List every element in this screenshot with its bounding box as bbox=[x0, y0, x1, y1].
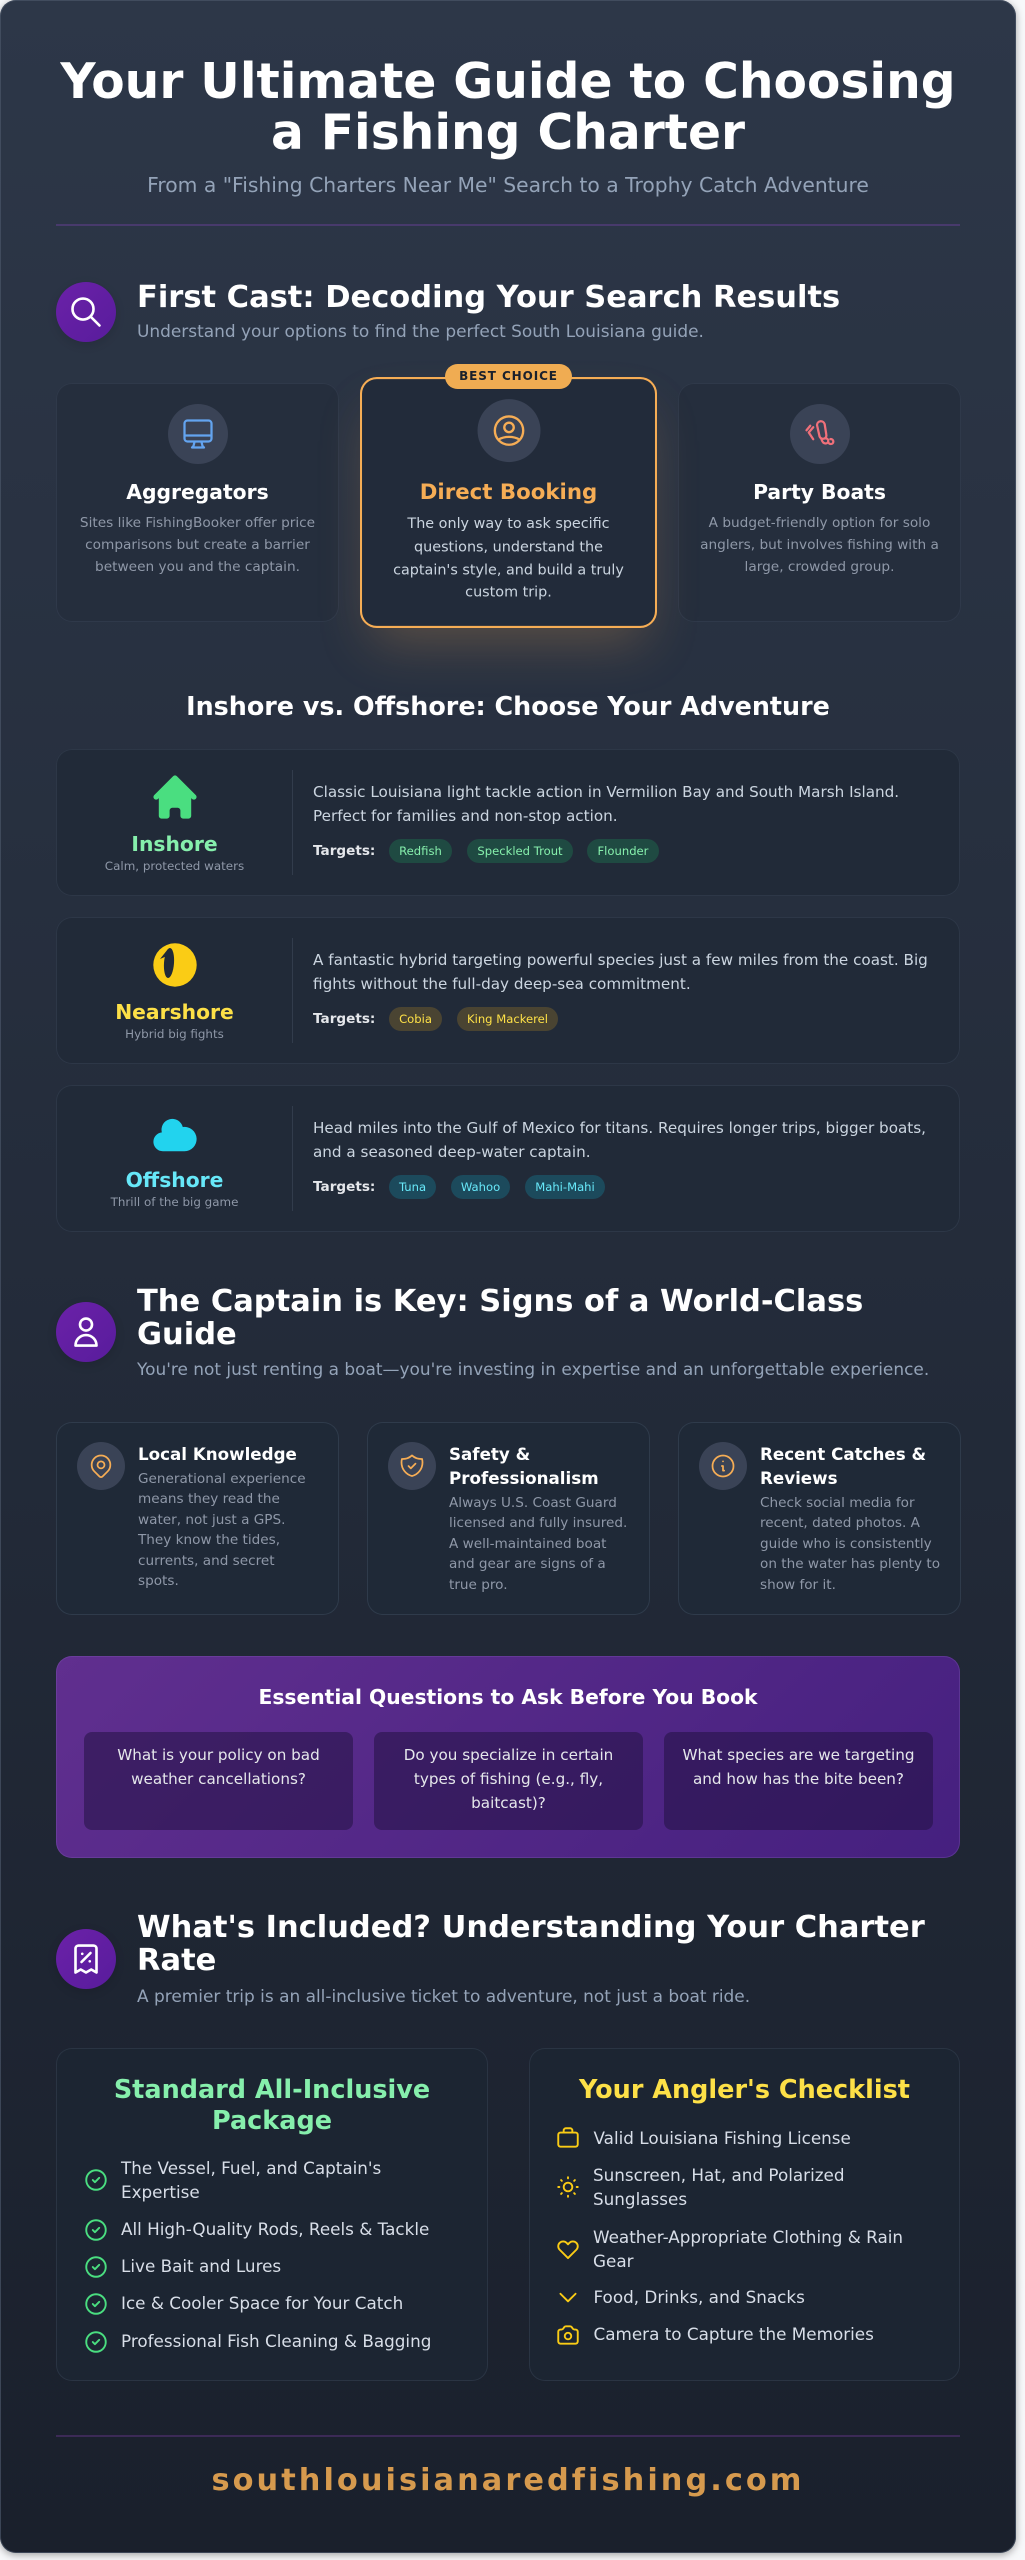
title: Your Ultimate Guide to Choosing bbox=[60, 54, 956, 110]
list item bbox=[85, 2293, 403, 2315]
question 2 bbox=[374, 1732, 643, 1830]
card text: comparisons but create a barrier bbox=[85, 537, 310, 553]
icon: party boat group bbox=[790, 404, 850, 464]
panel: offshore bbox=[56, 1085, 960, 1232]
item text bbox=[593, 2225, 903, 2273]
tag bbox=[587, 839, 659, 863]
zone tagline: Hybrid big fights bbox=[125, 1026, 224, 1040]
question 2: Do you specialize in certain bbox=[404, 1746, 613, 1764]
item text: Sunglasses bbox=[593, 2189, 687, 2209]
tag bbox=[467, 839, 573, 863]
icon: location pin bbox=[77, 1442, 125, 1490]
card text: between you and the captain. bbox=[95, 559, 300, 575]
card text bbox=[80, 515, 315, 575]
card title: Aggregators bbox=[126, 480, 269, 504]
description: Classic Louisiana light tackle action in Vermilion Bay and South Marsh Island. bbox=[313, 783, 899, 801]
card title: Safety & bbox=[449, 1444, 530, 1464]
card text: guide who is consistently bbox=[760, 1536, 932, 1552]
description bbox=[313, 1119, 926, 1161]
card title bbox=[449, 1444, 599, 1488]
card text: anglers, but involves fishing with a bbox=[700, 537, 939, 553]
heading: the captain bbox=[137, 1284, 863, 1352]
list item bbox=[85, 2331, 431, 2353]
title bbox=[60, 54, 956, 160]
item text: The Vessel, Fuel, and Captain's bbox=[121, 2158, 381, 2178]
item text: Sunscreen, Hat, and Polarized bbox=[593, 2165, 845, 2185]
checklist item bbox=[555, 2322, 945, 2348]
item text: All High-Quality Rods, Reels & Tackle bbox=[121, 2219, 429, 2239]
card text: recent, dated photos. A bbox=[760, 1515, 920, 1531]
card text: means they read the bbox=[138, 1491, 280, 1507]
targets label: Targets: bbox=[313, 1179, 375, 1195]
icon: info bbox=[699, 1442, 747, 1490]
card text bbox=[700, 515, 939, 575]
card text: questions, understand the bbox=[414, 538, 603, 555]
section heading: first cast bbox=[56, 280, 840, 342]
heading: the captain: The Captain is Key: Signs of a World-Class bbox=[137, 1284, 863, 1319]
panel heading: Standard All-Inclusive bbox=[114, 2075, 430, 2105]
tag bbox=[457, 1007, 558, 1031]
list item bbox=[85, 2158, 381, 2202]
item text: Gear bbox=[593, 2251, 634, 2271]
question 2: baitcast)? bbox=[471, 1794, 546, 1812]
footer url: southlouisianaredfishing.com bbox=[211, 2463, 805, 2498]
question 3 bbox=[664, 1732, 933, 1830]
subheading: what's included: A premier trip is an all-inclusive ticket to adventure, not just a boat ride. bbox=[137, 1986, 750, 2006]
card text: Always U.S. Coast Guard bbox=[449, 1495, 617, 1511]
tag: Flounder bbox=[598, 844, 648, 858]
tag bbox=[389, 839, 452, 863]
icon: desktop computer bbox=[168, 404, 228, 464]
tag bbox=[451, 1175, 510, 1199]
card: party boats bbox=[678, 383, 961, 622]
question 1: weather cancellations? bbox=[131, 1770, 306, 1788]
item text bbox=[120, 2158, 381, 2202]
badge: best choice: BEST CHOICE bbox=[459, 369, 558, 383]
card text: spots. bbox=[138, 1573, 179, 1589]
card text bbox=[393, 516, 624, 601]
icon: search bbox=[56, 282, 116, 342]
item text: Valid Louisiana Fishing License bbox=[594, 2128, 851, 2148]
card text: large, crowded group. bbox=[745, 559, 894, 575]
item text bbox=[593, 2165, 845, 2209]
card: local knowledge bbox=[56, 1422, 339, 1615]
icon: check bbox=[85, 2219, 107, 2241]
heading: what's included: Rate bbox=[137, 1943, 216, 1978]
icon: home bbox=[154, 775, 196, 819]
description: Perfect for families and non-stop action. bbox=[313, 807, 618, 825]
question 1: What is your policy on bad bbox=[117, 1746, 320, 1764]
heading: the captain: Guide bbox=[137, 1317, 237, 1352]
zone tagline: Calm, protected waters bbox=[105, 858, 244, 872]
icon: camera bbox=[555, 2322, 581, 2348]
card text bbox=[138, 1471, 306, 1589]
card text bbox=[449, 1495, 627, 1593]
checklist item bbox=[555, 2284, 945, 2310]
icon: heart bbox=[555, 2236, 581, 2262]
icon: cloud bbox=[153, 1118, 197, 1152]
card title: Party Boats bbox=[753, 480, 886, 504]
heading: what's included: What's Included? Understanding Your Charter bbox=[137, 1910, 925, 1945]
icon: check bbox=[85, 2256, 107, 2278]
description bbox=[313, 783, 899, 825]
zone name: Offshore bbox=[126, 1168, 223, 1192]
card: direct booking (highlighted) bbox=[360, 377, 657, 628]
description: fights without the full-day deep-sea commitment. bbox=[313, 975, 691, 993]
heading: inshore vs offshore: Inshore vs. Offshore: Choose Your Adventure bbox=[186, 690, 830, 720]
card text: Generational experience bbox=[138, 1471, 306, 1487]
description: and a seasoned deep-water captain. bbox=[313, 1143, 591, 1161]
card text bbox=[760, 1495, 940, 1593]
subheading: first cast: Understand your options to find the perfect South Louisiana guide. bbox=[137, 321, 704, 341]
item text: Camera to Capture the Memories bbox=[594, 2324, 874, 2344]
subheading: the captain: You're not just renting a boat—you're investing in expertise and an unforgettable experience. bbox=[137, 1359, 929, 1379]
tag bbox=[525, 1175, 605, 1199]
card text: show for it. bbox=[760, 1577, 836, 1593]
card text: currents, and secret bbox=[138, 1553, 275, 1569]
list item bbox=[85, 2219, 429, 2241]
card title: Recent Catches & bbox=[760, 1444, 926, 1464]
icon: user bbox=[56, 1302, 116, 1362]
zone name: Inshore bbox=[131, 832, 218, 856]
heading: what's included bbox=[137, 1910, 925, 1978]
card text: and gear are signs of a bbox=[449, 1556, 606, 1572]
question 1 bbox=[84, 1732, 353, 1830]
checklist item bbox=[555, 2224, 945, 2273]
title: a Fishing Charter bbox=[271, 104, 745, 160]
description: Head miles into the Gulf of Mexico for titans. Requires longer trips, bigger boats, bbox=[313, 1119, 926, 1137]
question 3: and how has the bite been? bbox=[693, 1770, 904, 1788]
heading: questions: Essential Questions to Ask Before You Book bbox=[258, 1685, 758, 1709]
card title: Reviews bbox=[760, 1468, 838, 1488]
tag: Wahoo bbox=[461, 1180, 500, 1194]
tag: Speckled Trout bbox=[477, 844, 563, 858]
card text: A well-maintained boat bbox=[449, 1536, 606, 1552]
tag bbox=[389, 1175, 436, 1199]
card: aggregators bbox=[56, 383, 339, 622]
card text: They know the tides, bbox=[138, 1532, 280, 1548]
panel: all-inclusive package bbox=[56, 2048, 488, 2381]
item text: Weather-Appropriate Clothing & Rain bbox=[593, 2227, 903, 2247]
panel heading: Package bbox=[212, 2106, 332, 2136]
card title: Professionalism bbox=[449, 1468, 599, 1488]
description bbox=[313, 951, 928, 993]
section heading: the captain bbox=[56, 1284, 929, 1379]
checklist item bbox=[557, 2127, 851, 2148]
panel: inshore bbox=[56, 749, 960, 896]
item text: Food, Drinks, and Snacks bbox=[594, 2287, 805, 2307]
badge: best choice bbox=[445, 364, 572, 389]
card text: Sites like FishingBooker offer price bbox=[80, 515, 315, 531]
tag: Tuna bbox=[399, 1180, 426, 1194]
icon: sun bbox=[557, 2176, 579, 2198]
icon: fish in circle bbox=[153, 943, 197, 987]
icon: check bbox=[85, 2169, 107, 2191]
tag: Cobia bbox=[399, 1012, 432, 1026]
list item bbox=[85, 2256, 281, 2278]
description: A fantastic hybrid targeting powerful species just a few miles from the coast. Big bbox=[313, 951, 928, 969]
tag: King Mackerel bbox=[467, 1012, 548, 1026]
icon: receipt bbox=[56, 1929, 116, 1989]
targets label: Targets: bbox=[313, 843, 375, 859]
item text: Ice & Cooler Space for Your Catch bbox=[121, 2293, 403, 2313]
card title bbox=[760, 1444, 926, 1488]
subtitle: From a "Fishing Charters Near Me" Search to a Trophy Catch Adventure bbox=[147, 172, 869, 196]
card title: Local Knowledge bbox=[138, 1444, 297, 1464]
icon: check bbox=[85, 2331, 107, 2353]
card title: Direct Booking bbox=[420, 478, 597, 504]
icon: check bbox=[85, 2293, 107, 2315]
item text: Professional Fish Cleaning & Bagging bbox=[121, 2331, 431, 2351]
item text: Live Bait and Lures bbox=[121, 2256, 281, 2276]
zone name: Nearshore bbox=[115, 1000, 234, 1024]
icon: briefcase bbox=[557, 2127, 579, 2148]
question 2: types of fishing (e.g., fly, bbox=[414, 1770, 603, 1788]
panel: nearshore bbox=[56, 917, 960, 1064]
heading: first cast: First Cast: Decoding Your Search Results bbox=[137, 280, 840, 315]
card: recent catches bbox=[678, 1422, 961, 1615]
item text: Expertise bbox=[121, 2182, 200, 2202]
tag: Redfish bbox=[399, 844, 442, 858]
tag: Mahi-Mahi bbox=[535, 1180, 595, 1194]
icon: shield check bbox=[388, 1442, 436, 1490]
card text: The only way to ask specific bbox=[407, 516, 610, 532]
offshore label bbox=[110, 1118, 238, 1208]
panel: angler's checklist bbox=[529, 2048, 960, 2381]
card text: captain's style, and build a truly bbox=[393, 561, 624, 578]
card text: on the water has plenty to bbox=[760, 1556, 940, 1572]
inshore label bbox=[105, 775, 244, 872]
card: safety bbox=[367, 1422, 650, 1615]
zone tagline: Thrill of the big game bbox=[111, 1194, 238, 1208]
card text: A budget-friendly option for solo bbox=[709, 515, 930, 531]
nearshore label bbox=[115, 943, 234, 1040]
tag bbox=[389, 1007, 442, 1031]
checklist item bbox=[557, 2165, 845, 2209]
section heading: what's included bbox=[56, 1910, 925, 2006]
targets label: Targets: bbox=[313, 1011, 375, 1027]
icon: user circle bbox=[477, 399, 540, 462]
icon: chevron bbox=[555, 2284, 581, 2310]
question 3: What species are we targeting bbox=[683, 1746, 914, 1764]
card text: custom trip. bbox=[465, 584, 552, 601]
card text: Check social media for bbox=[760, 1495, 915, 1511]
panel: essential questions bbox=[56, 1656, 960, 1858]
card text: true pro. bbox=[449, 1577, 508, 1593]
panel heading bbox=[114, 2075, 430, 2136]
card text: water, not just a GPS. bbox=[138, 1512, 285, 1528]
card text: licensed and fully insured. bbox=[449, 1515, 627, 1531]
panel heading: Your Angler's Checklist bbox=[579, 2075, 910, 2105]
